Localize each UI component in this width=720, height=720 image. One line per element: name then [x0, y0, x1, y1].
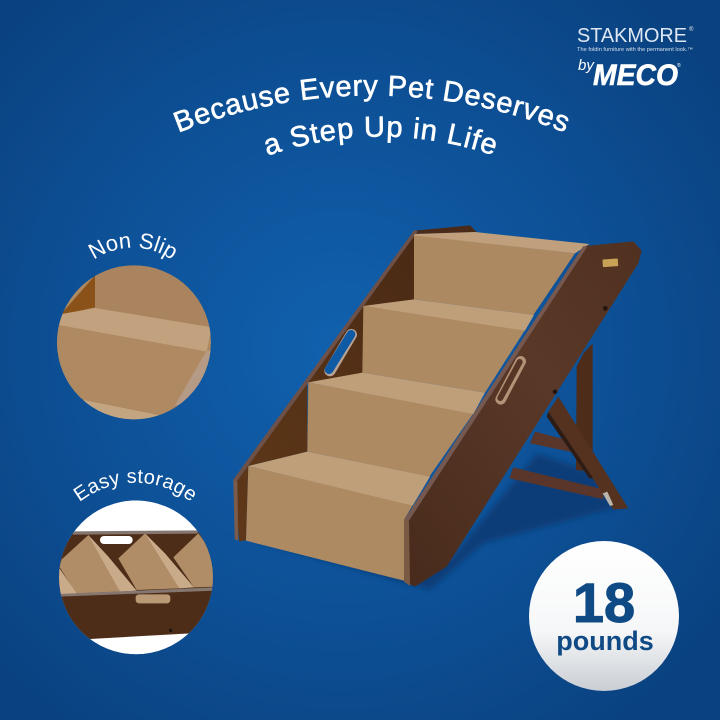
bolts — [603, 306, 608, 311]
left handle slot — [329, 334, 351, 371]
logo: Stakmore by Meco: STAKMORE — [577, 24, 687, 47]
logo: Stakmore by Meco: by — [578, 57, 595, 74]
top tread — [414, 232, 589, 253]
back top rail — [415, 225, 477, 234]
badge: 18 pounds: pounds — [556, 626, 654, 656]
label: Non Slip: Non Slip — [88, 234, 176, 260]
second tread — [308, 373, 485, 414]
logo: Stakmore by Meco: ® — [677, 62, 681, 69]
brass badge — [602, 258, 618, 267]
title: Because Every Pet Deserves — [173, 76, 568, 132]
right side panel — [404, 241, 642, 587]
left side wall — [233, 231, 415, 542]
circle: folded storage detail — [57, 500, 217, 654]
first tread — [248, 452, 430, 506]
top riser — [414, 235, 575, 315]
product: pet stairs — [233, 225, 642, 590]
label: Easy storage: Easy storage — [73, 470, 195, 502]
badge: 18 pounds: 18 — [573, 571, 635, 634]
logo: Stakmore by Meco: ® — [689, 26, 694, 33]
circle: non slip carpet detail — [57, 263, 213, 427]
logo: Stakmore by Meco: The foldin furniture with the permanent look.™ — [577, 47, 693, 53]
third riser — [362, 306, 525, 393]
logo: Stakmore by Meco — [577, 24, 694, 92]
folding legs — [509, 343, 628, 509]
right handle — [500, 361, 521, 399]
first riser — [246, 466, 413, 581]
badge: 18 pounds — [529, 541, 679, 691]
title: a Step Up in Life — [265, 116, 496, 155]
floor shadow — [250, 453, 620, 590]
logo: Stakmore by Meco: MECO — [593, 59, 678, 92]
second riser — [307, 382, 473, 477]
third tread — [363, 299, 534, 331]
